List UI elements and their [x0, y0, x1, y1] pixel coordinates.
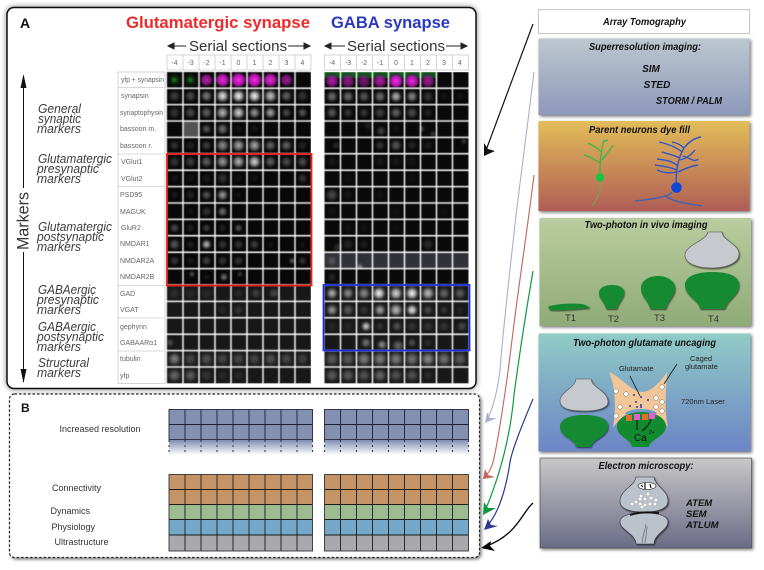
section number row, right: -3 [345, 60, 351, 67]
marker name column: VGAT [120, 307, 139, 314]
marker group labels: markers [37, 122, 81, 136]
label: dynamics: Dynamics [50, 506, 91, 516]
heading: GABA synapse: GABA synapse [331, 14, 450, 32]
data grid, left [169, 474, 312, 551]
label: glutamate [619, 364, 654, 396]
methods list: ATEM [685, 498, 713, 509]
section number row, left: -4 [171, 60, 178, 67]
arrow: superresolution to panel B [485, 72, 534, 423]
marker name column: GluR2 [121, 225, 141, 232]
section number row, right: 0 [394, 60, 398, 67]
section number row, right: 1 [410, 60, 414, 67]
section number row, left: -3 [187, 60, 194, 67]
marker name column: yfp + synapsin [121, 77, 164, 84]
marker name column: yfp [120, 373, 129, 380]
resolution grid, left [169, 410, 312, 455]
panel: electron microscopy: Electron microscopy: [598, 461, 694, 472]
icon: spine T4 [685, 272, 739, 309]
red outline: glutamatergic markers [167, 154, 312, 286]
panel: superresolution imaging: STED [644, 80, 670, 91]
marker name column: NMDAR1 [120, 241, 150, 248]
label: physiology: Physiology [52, 522, 96, 532]
data grid, right [324, 474, 468, 551]
section number row, right: 2 [426, 60, 430, 67]
serial sections label, right grid: Serial sections [347, 39, 445, 55]
marker name column: PSD95 [120, 192, 142, 199]
icon: spine T1 [548, 304, 590, 310]
label T1: T1 [565, 313, 576, 324]
label: ultrastructure: Ultrastructure [54, 537, 109, 547]
section number row, right: 4 [458, 60, 462, 67]
label: increased resolution: Increased resolution [60, 424, 141, 434]
marker group labels: markers [37, 366, 81, 380]
marker group labels: General [38, 102, 82, 116]
arrow: uncaging to panel B [484, 399, 533, 530]
arrow: electron microscopy to panel B [481, 503, 533, 551]
marker name column: synaptophysin [120, 110, 163, 117]
resolution grid, right [324, 410, 468, 455]
panel: array tomography: Array Tomography [602, 17, 686, 28]
marker name column: MAGUK [120, 209, 146, 216]
marker name column: tubulin [120, 356, 141, 363]
marker name column: bassoon m. [120, 126, 156, 133]
section number row, right: -2 [361, 60, 367, 67]
panel: two-photon glutamate uncaging [538, 334, 750, 452]
panel: superresolution imaging [538, 38, 750, 115]
marker name column: GABAARα1 [120, 340, 157, 347]
marker group labels: GABAergic [38, 320, 97, 334]
section number row, left: 2 [269, 60, 273, 67]
marker name column: VGlut1 [121, 159, 143, 166]
marker name column: NMDAR2B [120, 274, 155, 281]
serial sections label, left grid [168, 39, 310, 55]
icon: glutamate cloud [609, 372, 668, 428]
marker name column: VGlut2 [121, 176, 143, 183]
panel: two-photon in vivo imaging: Two-photon in vivo imaging [584, 220, 708, 231]
marker group labels: markers [37, 340, 81, 354]
marker group labels: presynaptic [36, 293, 100, 307]
microscopy grid: GABA synapse [323, 72, 470, 384]
marker group labels: synaptic [38, 112, 82, 126]
label T4: T4 [708, 314, 719, 325]
heading: Glutamatergic synapse: Glutamatergic synapse [126, 14, 310, 32]
methods list: SEM [686, 509, 708, 520]
section number row, left: 3 [285, 60, 289, 67]
marker group labels [36, 102, 113, 380]
blue outline: GABAergic markers [324, 285, 470, 350]
label: caged glutamate [664, 354, 718, 384]
vertical axis: markers [14, 74, 32, 383]
panel: superresolution imaging: SIM [642, 64, 661, 75]
arrow: dye fill to panel B [483, 175, 534, 479]
marker group labels: postsynaptic [36, 230, 105, 244]
label: connectivity: Connectivity [52, 483, 102, 493]
methods list: ATLUM [685, 520, 720, 531]
icon: spine T3 [641, 276, 675, 309]
icon: gray presynaptic bouton [685, 232, 739, 268]
marker name column: NMDAR2A [120, 258, 155, 265]
marker group labels: markers [37, 240, 81, 254]
label T2: T2 [608, 314, 619, 325]
section number row, right: -1 [377, 60, 383, 67]
panel: array tomography [538, 10, 750, 34]
marker group labels: postsynaptic [36, 330, 105, 344]
panel: two-photon glutamate uncaging: Two-photon glutamate uncaging [573, 338, 716, 349]
icon: green spine with receptors: 2+ [649, 430, 655, 436]
panel: two-photon in vivo imaging [540, 218, 751, 326]
label: laser: 720nm Laser [681, 397, 725, 406]
section number row, right: -4 [329, 60, 335, 67]
serial sections label, right grid [325, 39, 467, 55]
icon: blue neuron [635, 137, 702, 206]
icon: presynaptic terminal with vesicles [620, 477, 668, 512]
label T3: T3 [654, 313, 665, 324]
section number row, left: 1 [253, 60, 257, 67]
section number row, left: -2 [203, 60, 210, 67]
panel: superresolution imaging: Superresolution imaging: [589, 42, 701, 53]
panel B letter: B [21, 401, 30, 415]
marker name column [118, 72, 165, 384]
panel A letter: A [20, 15, 30, 31]
marker group labels: Glutamatergic [38, 220, 113, 234]
label: caged glutamate: Caged [690, 354, 712, 363]
marker group labels: markers [37, 303, 81, 317]
panel B: data dimensions [10, 394, 480, 558]
section number row, right [324, 55, 468, 70]
serial sections label, left grid: Serial sections [189, 39, 287, 55]
section number row, left: 4 [301, 60, 305, 67]
marker group labels: markers [37, 172, 81, 186]
label: caged glutamate: glutamate [685, 362, 718, 371]
microscopy grid: glutamatergic synapse [165, 72, 312, 384]
icon: green spine with receptors: Ca [634, 433, 647, 444]
icon: gray bouton [560, 379, 608, 411]
icon: spine T2 [599, 285, 624, 309]
panel: superresolution imaging: STORM / PALM [656, 96, 723, 107]
marker group labels: presynaptic [36, 162, 100, 176]
marker name column: gephyrin [120, 324, 147, 331]
arrow: in vivo imaging to panel B [483, 271, 533, 515]
label: glutamate: Glutamate [619, 364, 654, 373]
marker group labels: Glutamatergic [38, 152, 113, 166]
marker name column: synapsin [121, 93, 149, 100]
marker name column: bassoon r. [120, 143, 152, 150]
panel: electron microscopy [540, 458, 752, 548]
section number row, left: -1 [219, 60, 226, 67]
panel: parent neurons dye fill: Parent neurons dye fill [589, 125, 690, 136]
marker name column: GAD [120, 291, 135, 298]
icon: caged glutamate dots [614, 385, 664, 418]
marker group labels: GABAergic [38, 283, 97, 297]
icon: green spine [560, 415, 608, 447]
panel: parent neurons dye fill [538, 121, 750, 211]
methods list [685, 498, 720, 531]
section number row, left: 0 [237, 60, 241, 67]
section number row, right: 3 [442, 60, 446, 67]
arrow: array tomography to panel A [484, 24, 533, 156]
icon: glutamate molecules [629, 394, 649, 408]
icon: green neuron [584, 140, 613, 206]
icon: postsynaptic spine [620, 512, 668, 544]
marker group labels: Structural [38, 356, 90, 370]
icon: green spine with receptors [617, 410, 666, 447]
vertical axis: markers: Markers [14, 192, 32, 250]
section number row, left [167, 55, 311, 70]
